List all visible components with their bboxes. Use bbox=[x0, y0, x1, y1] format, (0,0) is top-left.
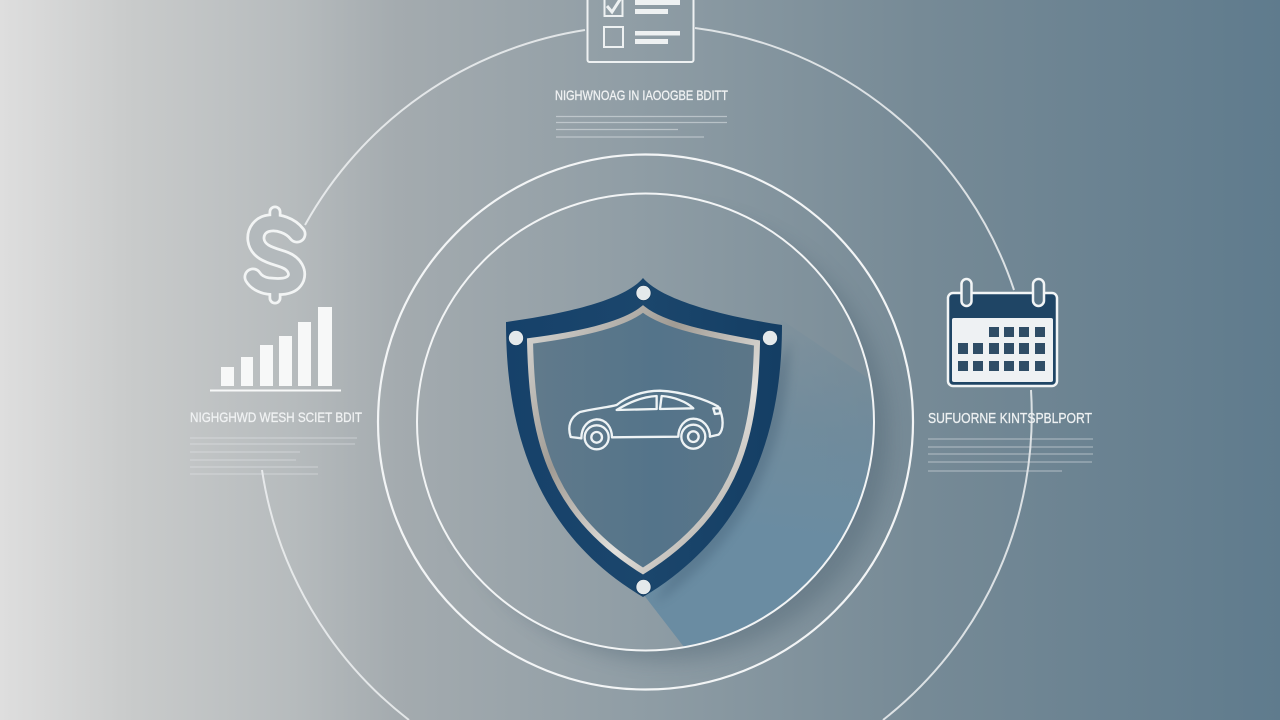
heading: top label: NIGHWNOAG IN IAOOGBE BDITT bbox=[555, 87, 728, 103]
heading: right label: SUFUORNE KINTSPBLPORT bbox=[928, 410, 1092, 427]
disc crescent shadow bbox=[516, 257, 892, 666]
icon: dollar sign bbox=[253, 212, 297, 298]
icon: calendar bbox=[948, 279, 1057, 386]
shield drop shadow bbox=[655, 340, 790, 604]
text block: top body lines bbox=[556, 116, 727, 137]
inner disc with ring bbox=[417, 194, 900, 700]
text block: left body lines bbox=[190, 438, 357, 474]
shield outer rim bbox=[506, 278, 782, 597]
text block: right body lines bbox=[928, 439, 1093, 471]
panel: top checklist bbox=[555, 0, 728, 137]
heading: left label: NIGHGHWD WESH SCIET BDIT bbox=[190, 409, 362, 425]
shield face with silver trim bbox=[530, 309, 757, 571]
shield long shadow on disc bbox=[644, 364, 873, 646]
panel: right calendar bbox=[928, 279, 1093, 471]
bar chart bbox=[210, 307, 341, 392]
shield rivets bbox=[508, 286, 778, 594]
outer ring bbox=[262, 28, 1032, 720]
shield bbox=[506, 278, 790, 604]
icon: checklist bbox=[588, 0, 694, 62]
panel: left cost bbox=[190, 212, 362, 474]
icon: car bbox=[569, 391, 723, 449]
middle ring bbox=[378, 154, 913, 690]
